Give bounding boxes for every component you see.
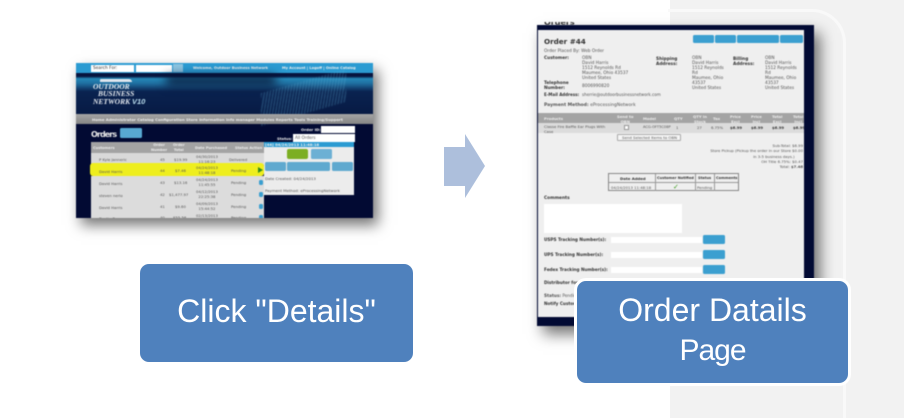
table header: Status Action	[235, 146, 262, 150]
order totals	[710, 143, 804, 169]
customer block	[544, 54, 797, 98]
table rows: 22:25:38	[198, 194, 215, 199]
page content: Send Selected Items to OBN	[622, 135, 677, 140]
table rows: 04/24/2013	[196, 177, 218, 182]
order id filter	[276, 125, 356, 143]
table rows: 15:44:52	[198, 206, 215, 211]
details popup	[264, 142, 354, 195]
products table: QTY in	[693, 114, 707, 119]
payment method: Payment Method: eProcessingNetwork	[544, 103, 636, 108]
navigation bar	[76, 114, 373, 124]
ups tracking	[544, 249, 726, 260]
comments label: Comments	[544, 196, 570, 201]
table rows	[89, 152, 265, 219]
status: Status: Pending	[544, 293, 579, 298]
top search bar: Welcome, Outdoor Business Network	[193, 66, 268, 70]
table rows: 04/30/2013	[196, 154, 218, 159]
table header	[91, 142, 264, 153]
comments box	[544, 204, 682, 233]
products table: Total	[793, 114, 803, 119]
status history table: Comments	[716, 176, 737, 180]
button: click details: Click "Details"	[177, 293, 376, 329]
orders table	[89, 141, 265, 219]
table header: Total	[174, 148, 184, 152]
products table	[538, 112, 805, 134]
products table: Total	[772, 114, 782, 119]
table rows: $13.16	[174, 180, 187, 185]
fedex tracking	[544, 264, 726, 275]
right background panel	[670, 0, 904, 418]
customer block: E-Mail Address:	[544, 92, 579, 97]
customer block: Maumee, Ohio	[692, 76, 723, 81]
table rows: David Harris	[99, 205, 122, 210]
customer block: sherrie@outdoorbusinessnetwork.com	[582, 92, 661, 97]
logo: OUTDOOR	[93, 82, 130, 91]
navigation bar: Home Administrator Catalog Configuration Store Information Info manager Modules Reports Tools Training/Support	[92, 117, 343, 122]
order totals: Sub-Total: $6.99	[773, 143, 803, 148]
products table: $6.99	[730, 125, 742, 130]
order id filter: Order ID:	[301, 127, 321, 132]
popup title	[264, 142, 354, 147]
products table: Excl	[773, 119, 781, 124]
top search bar	[76, 63, 373, 73]
button: order details page: Order Datails	[618, 292, 807, 328]
top action buttons	[692, 34, 804, 44]
customer block: 1512 Reynolds	[765, 66, 797, 71]
table header: Number	[151, 148, 167, 152]
status history table: Status	[698, 176, 711, 180]
table rows: 44	[160, 168, 165, 173]
products table: $6.99	[772, 125, 784, 130]
customer block: Address:	[733, 62, 754, 67]
customer block: Address:	[656, 62, 677, 67]
order title: Order #44	[544, 37, 586, 46]
customer block: United States	[765, 86, 794, 91]
date created: Date Created: 04/24/2013	[265, 176, 316, 181]
usps tracking	[544, 234, 726, 245]
banner	[76, 73, 373, 114]
right screenshot: order details	[537, 25, 814, 326]
details popup: [44] 04/24/2013 11:48:18	[265, 142, 319, 147]
customer block: David Harris	[692, 61, 719, 66]
table header: Date Purchased	[195, 146, 227, 150]
logo	[92, 78, 146, 106]
customer block: OBN	[692, 56, 702, 61]
table rows: 43	[160, 180, 165, 185]
table rows: 04/12/2013	[196, 189, 218, 194]
top search bar: My Account | Logoff | Online Catalog	[282, 66, 356, 70]
table rows: 04/24/2013	[196, 165, 218, 170]
table rows: 41	[160, 204, 165, 209]
table header: Order	[173, 143, 185, 147]
products table: 1	[676, 125, 678, 130]
products table: $6.99	[751, 125, 763, 130]
products table: Products	[544, 116, 563, 121]
products table: Stock	[694, 119, 706, 124]
customer block: Maumee, Ohio 43537	[582, 71, 628, 76]
products table: 6.75%	[711, 125, 723, 130]
status history table	[608, 173, 739, 191]
notify customer: Notify Customer	[544, 301, 583, 306]
customer block: Rd	[692, 71, 698, 76]
table rows: Pending	[231, 168, 246, 173]
edit button	[311, 149, 332, 159]
logo: NETWORK V10	[93, 97, 145, 106]
send button	[617, 134, 681, 141]
table rows: Pending	[231, 204, 246, 209]
customer block: David Harris	[765, 61, 792, 66]
customer block: Telephone	[544, 81, 569, 86]
logo: BUSINESS	[98, 89, 134, 98]
usps tracking: USPS Tracking Number(s):	[544, 237, 606, 242]
table rows: 11:16:23	[198, 159, 215, 164]
customer block: Customer:	[544, 56, 569, 61]
page content	[538, 30, 804, 317]
table header: Customers	[93, 146, 115, 150]
status history table: Customer Notified	[657, 176, 694, 180]
customer block: United States	[692, 86, 721, 91]
customer block: Billing	[733, 57, 748, 62]
order id filter: Status:	[277, 136, 292, 141]
table rows: $1,477.97	[169, 192, 188, 197]
products table: Case	[544, 129, 553, 134]
customer block: 1512 Reynolds	[692, 66, 724, 71]
table rows: steven nerlo	[99, 193, 123, 198]
table rows: $19.99	[174, 157, 187, 162]
order totals: Store Pickup (Pickup the order in our Store $0.00	[710, 148, 803, 153]
customer block: OBN	[582, 56, 592, 61]
table rows: 45	[160, 157, 165, 162]
highlighted row	[90, 163, 264, 176]
order source: Order Placed By: Web Order	[544, 49, 604, 54]
status history table: ✓	[673, 183, 679, 191]
table rows: $9.60	[175, 204, 186, 209]
products table: OBN	[621, 119, 630, 124]
distributor: Distributor for	[544, 280, 578, 285]
products table: QTY	[674, 116, 683, 121]
products table: Price	[730, 114, 741, 119]
ups tracking: UPS Tracking Number(s):	[544, 252, 603, 257]
rounded panel outline	[668, 9, 846, 418]
payment method: Payment Method: eProcessingNetwork	[265, 188, 340, 193]
customer block: Rd	[765, 71, 771, 76]
customer block: David Harris	[582, 61, 609, 66]
table rows: 02/13/2013	[196, 213, 218, 218]
order totals: Total: $7.46	[780, 164, 803, 169]
order totals: in 3-5 business days.)	[753, 154, 795, 159]
table rows: David Harris	[99, 169, 122, 174]
add button	[120, 128, 142, 138]
table header: Order	[153, 143, 165, 147]
table rows: Pending	[231, 192, 246, 197]
button: order details page: Page	[679, 334, 746, 367]
status history table: Pending	[697, 185, 712, 190]
customer block: Number:	[544, 86, 565, 91]
table rows: P Kyle Janneric	[99, 157, 127, 162]
details button	[287, 149, 308, 159]
customer block: United States	[582, 76, 611, 81]
top search bar: Search For:	[93, 66, 117, 71]
button: click details	[140, 264, 413, 362]
order id filter: All Orders	[295, 135, 316, 140]
table rows: David Harris	[99, 181, 122, 186]
action buttons	[265, 162, 286, 171]
products table: 27	[697, 125, 702, 130]
products table: Price	[751, 114, 762, 119]
customer block: 43537	[692, 81, 706, 86]
products table: Tax	[713, 116, 720, 121]
products table: Incl	[794, 119, 802, 124]
heading: Orders: Orders	[91, 130, 116, 139]
products table: ACG-OFT5C08P	[643, 125, 671, 129]
left screenshot: orders list	[76, 63, 373, 218]
order totals: OH Title 6.75%: $0.47	[761, 159, 803, 164]
customer block: OBN	[765, 56, 775, 61]
status history table: Date Added	[620, 176, 646, 181]
products table: Incl	[753, 119, 760, 124]
customer block: 8006990820	[582, 84, 609, 89]
products table: Excl	[731, 119, 740, 124]
status history table: 04/24/2013 11:48:18	[611, 185, 651, 190]
customer block: Shipping	[656, 57, 677, 62]
table rows: 04/09/2013	[196, 201, 218, 206]
arrow	[444, 134, 485, 198]
table rows: Pending	[231, 180, 246, 185]
button: order details page	[574, 278, 851, 386]
table rows: 42	[160, 192, 165, 197]
table rows: 11:45:55	[198, 182, 215, 187]
table rows: $7.46	[175, 168, 186, 173]
products table: Model	[643, 116, 656, 121]
fedex tracking: Fedex Tracking Number(s):	[544, 267, 608, 272]
customer block: Maumee, Ohio	[765, 76, 796, 81]
products table: Classe Fire Baffle Ear Plugs With	[544, 124, 605, 129]
customer block: 43537	[765, 81, 779, 86]
customer block: 1512 Reynolds Rd	[582, 66, 621, 71]
products table: Send to	[617, 114, 633, 119]
table rows: 11:48:18	[198, 170, 215, 175]
table rows: Delivered	[229, 157, 247, 162]
